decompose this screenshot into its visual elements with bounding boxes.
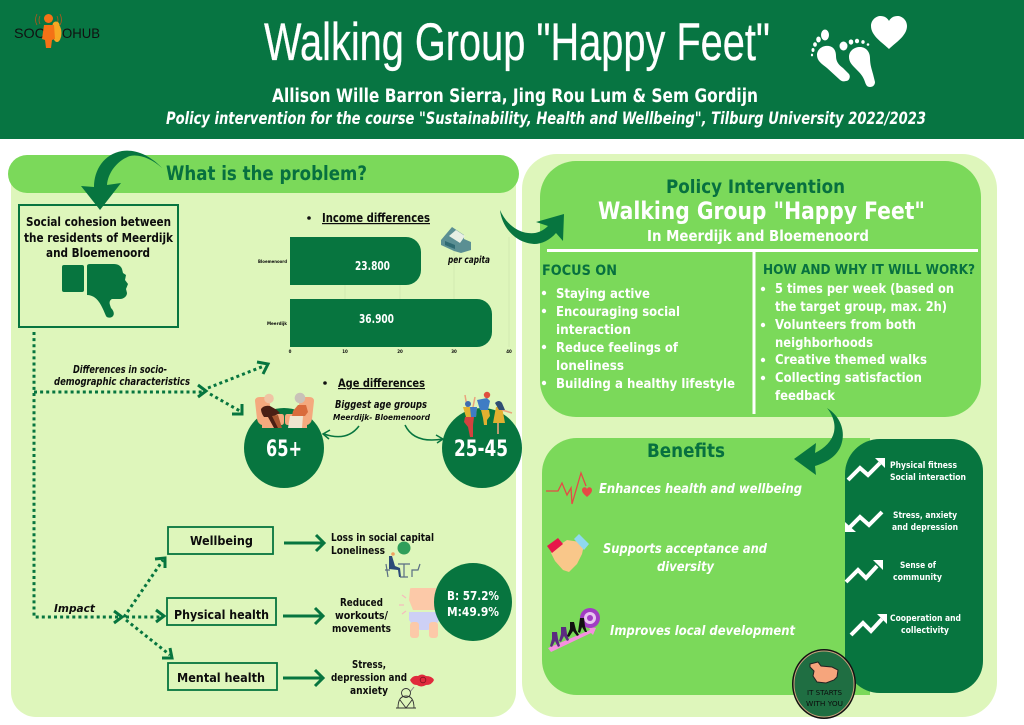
- text: biggest age groups: Meerdijk- Bloemenoord: [333, 413, 430, 422]
- text: wellbeing effects: Loneliness: [331, 545, 385, 557]
- icon: belly: [399, 588, 441, 638]
- icon: elderly couple: [255, 393, 314, 428]
- arrow: physical effect: [283, 608, 323, 624]
- text: mental effects: anxiety: [350, 685, 388, 697]
- outcome: cooperation up: Cooperation and: [890, 614, 961, 624]
- icon: pointing hand: [810, 662, 838, 683]
- circle: inactivity rates: B: 57.2%: [447, 588, 499, 603]
- icon: stressed person: [396, 674, 434, 708]
- text: physical effects: Reduced: [340, 597, 383, 609]
- curved arrow: to 25-45: [405, 425, 443, 443]
- column: focus on: FOCUS ON: [542, 263, 617, 279]
- text: impact: Impact: [54, 602, 96, 615]
- box: physical health: [167, 598, 276, 625]
- box: mental health: Mental health: [177, 670, 265, 685]
- text: physical effects: movements: [332, 623, 391, 635]
- panel: right background: [522, 154, 997, 717]
- arrow: mental effect: [283, 670, 323, 686]
- badge: it starts with you: WITH YOU: [806, 700, 843, 708]
- icon: cash: [441, 227, 471, 253]
- icon: thumbs down: [62, 264, 128, 318]
- dotted arrow: to income: [208, 362, 268, 388]
- header banner: [0, 0, 1024, 139]
- text: socio-demographic differences: Differences in socio-: [73, 364, 167, 376]
- text: biggest age groups: [333, 399, 430, 422]
- panel: policy intervention: Walking Group "Happy Feet": [598, 197, 925, 225]
- circle: inactivity rates: [434, 563, 512, 641]
- column: focus on: Staying active: [556, 287, 650, 302]
- heading bar: [8, 155, 519, 193]
- circle: 25-45: [442, 408, 522, 488]
- column: focus on: loneliness: [556, 359, 624, 374]
- logo: SocioHub: OHUB: [62, 25, 100, 41]
- text: biggest age groups: Biggest age groups: [335, 399, 427, 411]
- arrow: policy to benefits: [794, 408, 843, 475]
- column: how and why: HOW AND WHY IT WILL WORK?: [763, 263, 975, 278]
- dotted arrow: to age: [210, 394, 242, 414]
- benefit: acceptance: diversity: [657, 560, 714, 575]
- column: how and why: the target group, max. 2h): [775, 300, 947, 315]
- icon: handshake: [547, 534, 589, 572]
- column: focus on: interaction: [556, 323, 631, 338]
- column: how and why: neighborhoods: [775, 336, 873, 351]
- cohesion box: Social cohesion between: [26, 214, 171, 229]
- outcome: fitness and interaction up: Physical fitness: [890, 461, 957, 471]
- panel: benefits: Benefits: [647, 441, 725, 462]
- outcome: community up: community: [893, 573, 942, 583]
- box: wellbeing: Wellbeing: [190, 533, 253, 548]
- benefit: acceptance: [603, 542, 768, 575]
- outcome: community up: Sense of: [900, 561, 936, 571]
- box: mental health: [168, 663, 277, 690]
- dotted arrows: impact branches: [114, 558, 172, 658]
- column: how and why: Creative themed walks: [775, 353, 927, 368]
- cohesion box: [19, 205, 178, 327]
- text: socio-demographic differences: demographic characteristics: [54, 376, 190, 388]
- badge: it starts with you: IT STARTS: [807, 689, 843, 697]
- circle: inactivity rates: M:49.9%: [447, 604, 499, 619]
- logo: SocioHub: [14, 14, 100, 48]
- icon: people climbing to target: [548, 608, 600, 652]
- cohesion box: and Bloemenoord: [46, 245, 150, 260]
- box: physical health: Physical health: [174, 607, 269, 622]
- outcome: cooperation up: [851, 614, 961, 636]
- column: how and why: [761, 263, 975, 404]
- logo: SocioHub: SOC: [14, 25, 45, 41]
- text: mental effects: Stress,: [352, 659, 386, 671]
- bar chart: income: [258, 237, 512, 354]
- bar chart: income: 36.900: [359, 312, 394, 326]
- authors: Allison Wille Barron Sierra, Jing Rou Lum & Sem Gordijn: [272, 86, 758, 107]
- circle: 25-45: 25-45: [454, 437, 508, 462]
- circle: 65+: [244, 408, 324, 488]
- panel: what is the problem: [8, 151, 522, 717]
- text: mental effects: [331, 659, 407, 697]
- arrow: heading to cohesion box: [81, 151, 162, 210]
- arrow: wellbeing effect: [284, 535, 324, 551]
- text: socio-demographic differences: [54, 364, 190, 388]
- badge: it starts with you: [792, 649, 856, 719]
- column: how and why: 5 times per week (based on: [775, 282, 954, 297]
- column: how and why: Collecting satisfaction: [775, 371, 922, 386]
- benefit: local development: Improves local development: [610, 624, 796, 639]
- column: focus on: Building a healthy lifestyle: [556, 377, 735, 392]
- column: how and why: Volunteers from both: [775, 318, 916, 333]
- text: physical effects: [332, 597, 391, 635]
- bar chart: income: 23.800: [355, 259, 390, 273]
- panel: policy intervention: Policy Intervention: [666, 176, 845, 198]
- bar chart: income: Bloemenoord: [258, 259, 287, 264]
- bar chart: income: 30: [451, 349, 457, 354]
- panel: outcomes: [845, 439, 983, 693]
- bar chart: income: 40: [506, 349, 512, 354]
- outcome: community up: [846, 560, 942, 583]
- outcome: cooperation up: collectivity: [901, 626, 949, 636]
- text: wellbeing effects: [331, 532, 434, 557]
- icon: footprints and heart: [811, 16, 907, 87]
- arrow: problem to policy: [500, 210, 564, 244]
- text: wellbeing effects: Loss in social capital: [331, 532, 434, 544]
- panel: policy intervention: [540, 161, 981, 417]
- title: Walking Group "Happy Feet": [264, 13, 770, 72]
- panel: policy intervention: In Meerdijk and Bloemenoord: [647, 227, 869, 245]
- benefit: acceptance: Supports acceptance and: [603, 542, 768, 557]
- outcome: stress down: Stress, anxiety: [893, 511, 957, 521]
- column: how and why: feedback: [775, 389, 835, 404]
- bar chart: income: 0: [289, 349, 292, 354]
- bar chart: income: 10: [342, 349, 348, 354]
- outcome: fitness and interaction up: Social interaction: [890, 473, 966, 483]
- icon: heartbeat: [546, 473, 592, 504]
- text: physical effects: workouts/: [335, 610, 388, 622]
- benefit: health: Enhances health and wellbeing: [599, 482, 802, 497]
- dotted connector: main line: [34, 332, 206, 617]
- income heading: Income differences: [322, 211, 430, 225]
- column: focus on: [542, 263, 735, 392]
- outcome: fitness and interaction up: [848, 458, 966, 483]
- icon: dancers: [463, 392, 512, 437]
- bar chart: income: 20: [397, 349, 403, 354]
- heading bar: What is the problem?: [166, 162, 367, 185]
- curved arrow: to 65+: [323, 426, 359, 439]
- icon: lonely person at table: [385, 542, 420, 577]
- text: per capita: per capita: [447, 255, 490, 266]
- bar chart: income: Meerdijk: [267, 321, 287, 326]
- panel: benefits: [542, 438, 870, 695]
- column: focus on: Reduce feelings of: [556, 341, 678, 356]
- text: mental effects: depression and: [331, 672, 407, 684]
- box: wellbeing: [168, 527, 273, 554]
- circle: 65+: 65+: [266, 437, 302, 462]
- age heading: Age differences: [338, 376, 425, 390]
- outcome: stress down: [845, 511, 958, 533]
- column: focus on: Encouraging social: [556, 305, 680, 320]
- outcome: stress down: and depression: [892, 523, 958, 533]
- cohesion box: the residents of Meerdijk: [24, 230, 174, 245]
